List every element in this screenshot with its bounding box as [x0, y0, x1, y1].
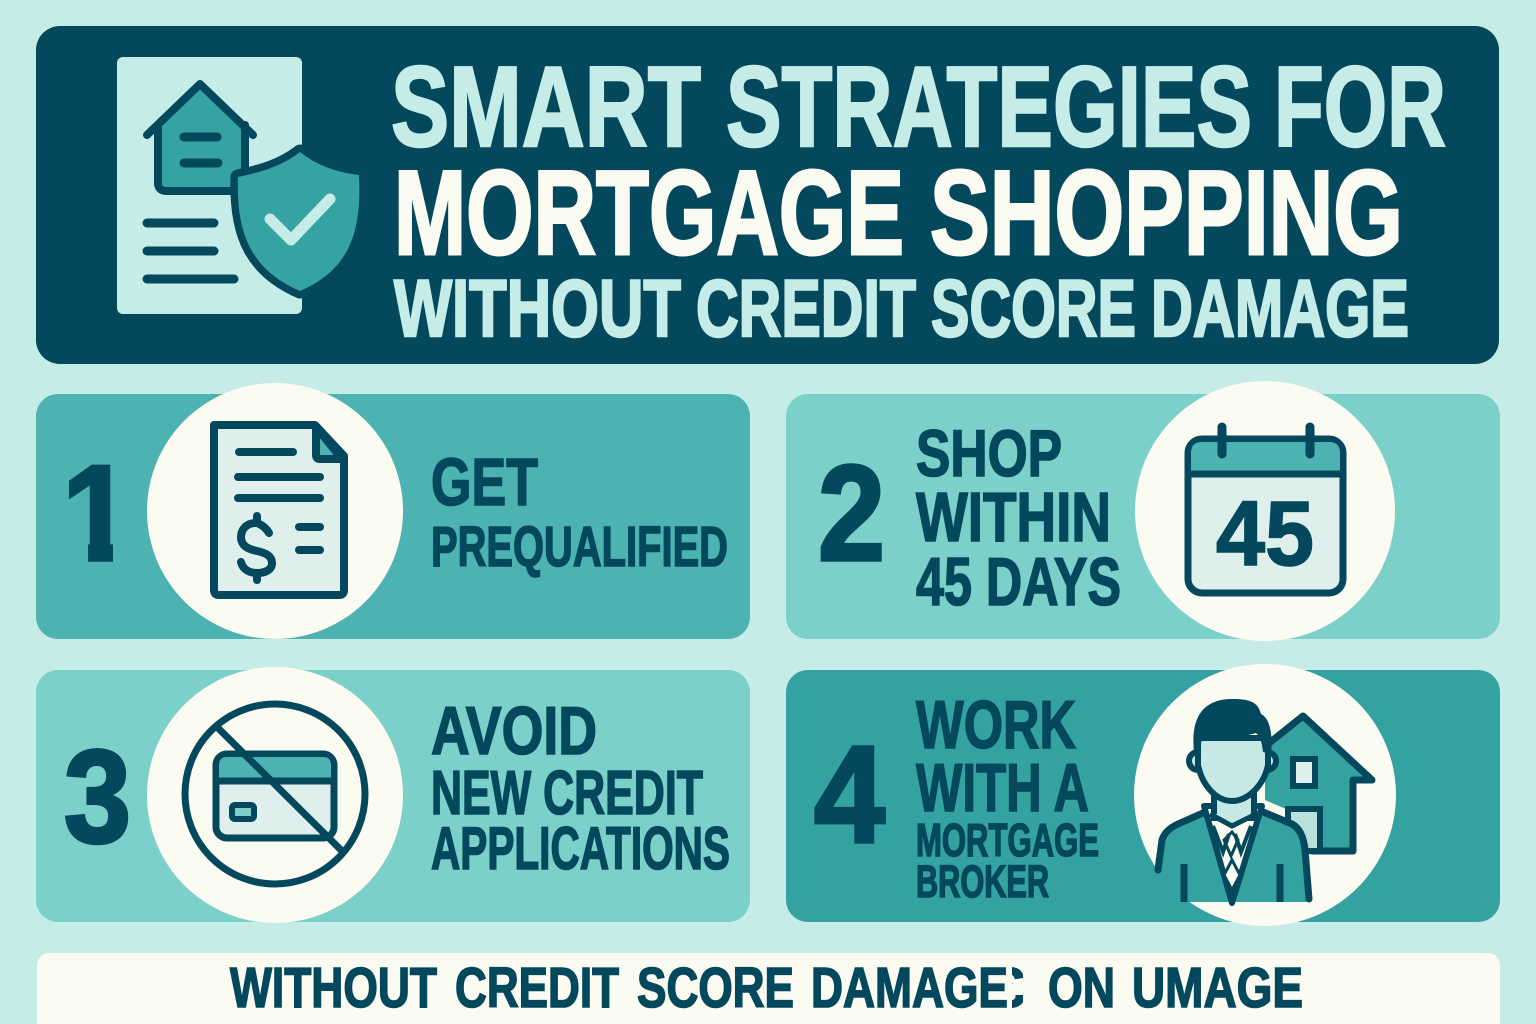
title: STRATEGIES [726, 44, 1252, 171]
title [391, 44, 1446, 354]
panel: step 4 work with a mortgage broker [786, 664, 1500, 926]
banner text: ON [1048, 956, 1115, 1020]
title: SCORE [931, 264, 1136, 354]
step 4 label: WORK [916, 687, 1076, 763]
bottom banner [37, 953, 1500, 1024]
title: MORTGAGE [394, 146, 904, 280]
step 4 label: BROKER [916, 856, 1049, 907]
step 3 label: AVOID [431, 693, 597, 769]
panel: step 3 avoid new credit applications [36, 667, 750, 923]
banner text: SCORE [637, 956, 794, 1020]
step 3 label: NEW CREDIT [431, 759, 703, 828]
banner text: WITHOUT [230, 956, 437, 1020]
title: WITHOUT [394, 264, 681, 354]
title: DAMAGE [1151, 264, 1409, 354]
number 1: 1 [62, 437, 132, 589]
icon: broker with house [1156, 699, 1372, 903]
step 1 label: GET [431, 445, 538, 520]
number 3: 3 [64, 723, 131, 870]
panel: step 1 get prequalified [36, 383, 750, 639]
step 3 label: APPLICATIONS [431, 815, 730, 882]
number 2: 2 [818, 437, 885, 589]
step 2 label: 45 DAYS [916, 544, 1121, 620]
icon: calendar 45 [1188, 427, 1343, 593]
banner text: DAMAGE [811, 956, 1008, 1020]
banner text: UMAGE [1132, 956, 1303, 1020]
title: FOR [1274, 44, 1446, 171]
icon: calendar 45: 45 [1216, 483, 1314, 585]
icon: document with dollar sign [214, 425, 344, 595]
step 4 label [916, 687, 1099, 907]
step 1 label: PREQUALIFIED [431, 515, 728, 579]
number 4: 4 [814, 718, 885, 872]
icon: crossed out credit card [185, 704, 365, 884]
banner text: CREDIT [455, 956, 619, 1020]
step 4 label: WITH A [916, 750, 1089, 826]
header panel [36, 26, 1499, 364]
panel: step 2 shop within 45 days [786, 381, 1500, 641]
banner text: S [990, 956, 1026, 1020]
banner text [230, 956, 1303, 1020]
title: SMART [391, 44, 701, 171]
step 2 label: SHOP [916, 416, 1062, 490]
step 2 label [916, 416, 1121, 620]
icon: document with house and shield [117, 57, 359, 314]
step 3 label [431, 693, 730, 882]
step 4 label: MORTGAGE [916, 814, 1099, 866]
step 1 label [431, 445, 728, 579]
step 2 label: WITHIN [916, 478, 1111, 556]
title: CREDIT [696, 264, 916, 354]
